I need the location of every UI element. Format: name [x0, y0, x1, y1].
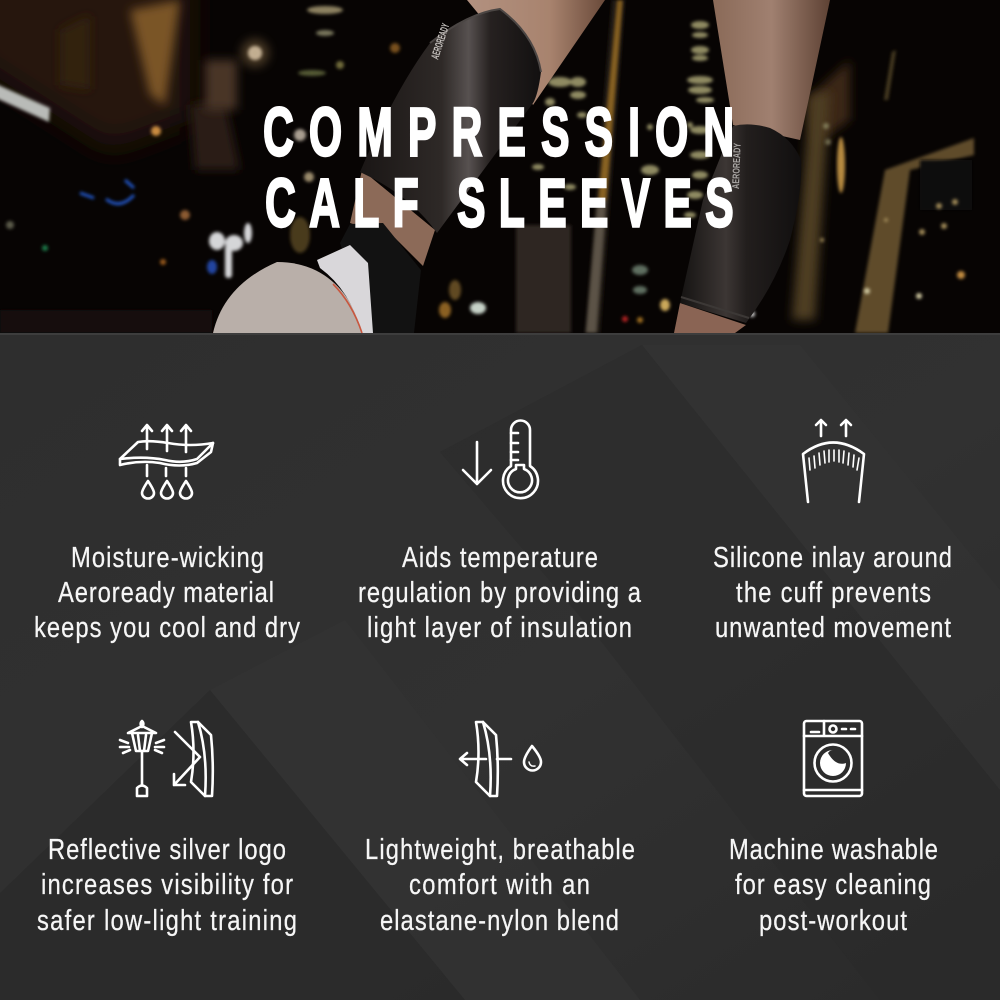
right compression sleeve: AEROREADY — [731, 143, 744, 189]
feature 4: reflective logo — [37, 721, 297, 937]
text: silicone cuff — [713, 541, 952, 644]
white shoe — [317, 245, 373, 333]
text: temperature regulation: Aids temperature — [402, 541, 598, 574]
text: silicone cuff: unwanted movement — [715, 611, 952, 644]
text: lightweight breathable — [365, 833, 635, 937]
feature 1: moisture-wicking — [34, 425, 301, 644]
city bokeh — [439, 21, 714, 323]
lower panel background — [0, 333, 1000, 1000]
text: lightweight breathable: comfort with an — [409, 868, 590, 901]
feature 3: silicone cuff — [713, 420, 952, 644]
text: silicone cuff: the cuff prevents — [736, 576, 931, 609]
text: moisture-wicking: Aeroready material — [58, 576, 274, 609]
feature 5: lightweight breathable — [365, 722, 635, 937]
text: moisture-wicking: keeps you cool and dry — [34, 611, 301, 644]
left compression sleeve — [360, 9, 541, 233]
white fan-shaped street object — [209, 223, 252, 278]
text: machine washable — [729, 833, 938, 937]
pole and central pillars — [516, 0, 625, 333]
text: reflective logo — [37, 833, 297, 937]
rounded bollard — [213, 262, 362, 333]
left calf skin — [467, 0, 605, 105]
text: lightweight breathable: Lightweight, breathable — [365, 833, 635, 866]
title: COMPRESSION — [263, 94, 734, 171]
hero photo: runner's calves on a night street — [0, 0, 1000, 333]
icon: fabric with outgoing arrow and drop — [460, 722, 541, 796]
text: moisture-wicking — [34, 541, 301, 644]
text: temperature regulation: light layer of insulation — [367, 611, 632, 644]
text: machine washable: for easy cleaning — [735, 868, 931, 901]
left building — [0, 0, 240, 170]
street light — [248, 46, 262, 60]
text: machine washable: post-workout — [759, 904, 908, 937]
feature 6: machine washable — [729, 721, 938, 937]
text: temperature regulation — [358, 541, 641, 644]
text: reflective logo: Reflective silver logo — [48, 833, 286, 866]
right compression sleeve — [680, 124, 801, 323]
text: lightweight breathable: elastane-nylon blend — [380, 904, 619, 937]
title — [263, 94, 734, 242]
title: CALF SLEEVES — [265, 165, 734, 242]
icon: fabric with arrows and drops — [120, 425, 213, 499]
right calf skin — [713, 0, 830, 140]
distant lights and street — [0, 6, 400, 333]
text: moisture-wicking: Moisture-wicking — [71, 541, 264, 574]
right buildings with lit doorway — [749, 50, 974, 333]
icon: washing machine — [804, 721, 862, 796]
running shoe sock — [340, 223, 421, 333]
icon: sleeve cuff with up arrows — [803, 420, 864, 502]
icon: down arrow and thermometer — [463, 420, 538, 498]
sleeve cuff — [681, 297, 749, 318]
icon: street lamp and reflective fabric — [120, 721, 213, 796]
text: reflective logo: increases visibility for — [41, 868, 293, 901]
blue ring lights — [80, 180, 134, 204]
text: reflective logo: safer low-light training — [37, 904, 297, 937]
text: temperature regulation: regulation by providing a — [358, 576, 641, 609]
text: machine washable: Machine washable — [729, 833, 938, 866]
feature 2: temperature — [358, 420, 641, 644]
text: silicone cuff: Silicone inlay around — [713, 541, 952, 574]
